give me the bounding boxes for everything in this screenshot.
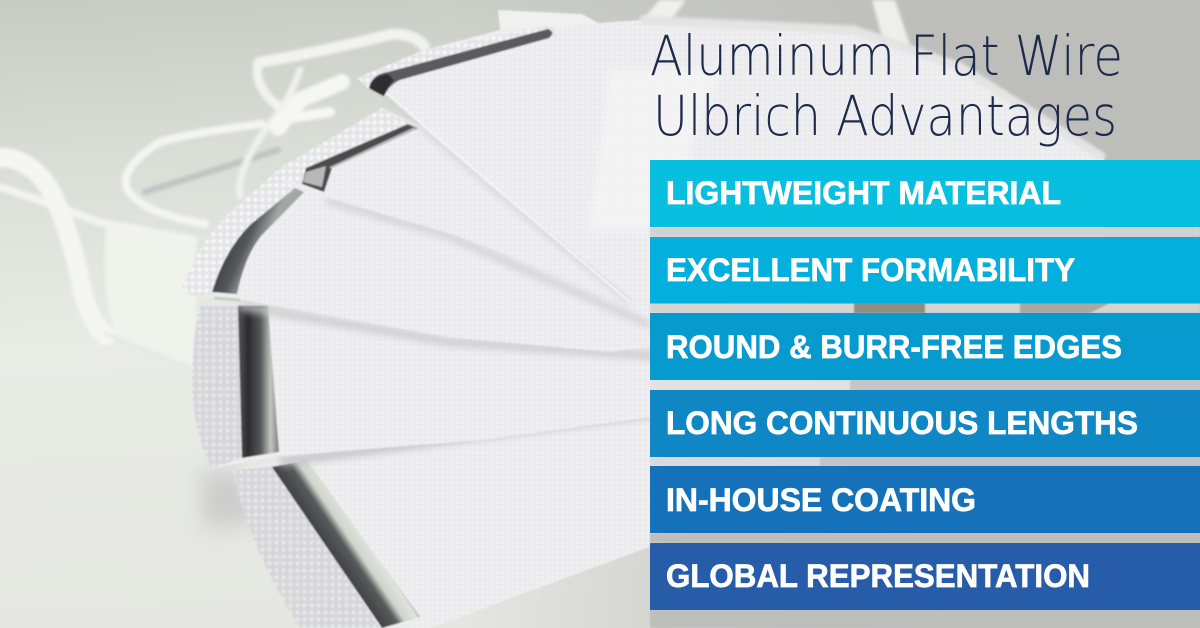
advantages list (650, 160, 1200, 610)
bar: in-house coating: IN-HOUSE COATING (666, 482, 976, 518)
photo: elastic straps (0, 0, 910, 372)
photo: third mask (182, 168, 660, 356)
bar: global representation (650, 543, 1200, 610)
title line 2: Ulbrich Advantages (653, 84, 1117, 148)
title (650, 24, 1123, 148)
photo: top mask (357, 10, 1104, 305)
bar: round and burr-free edges (650, 313, 1200, 380)
photo: fourth mask (192, 306, 660, 468)
photo: soft folds at right edge (650, 227, 1200, 628)
bar: in-house coating (650, 466, 1200, 533)
title line 1: Aluminum Flat Wire (650, 24, 1123, 88)
bar: lightweight material (650, 160, 1200, 227)
bar: round and burr-free edges: ROUND & BURR-FREE EDGES (666, 329, 1122, 365)
bar: excellent formability: EXCELLENT FORMABILITY (666, 252, 1075, 288)
bar: lightweight material: LIGHTWEIGHT MATERIAL (666, 175, 1061, 211)
bar: long continuous lengths: LONG CONTINUOUS LENGTHS (666, 405, 1138, 441)
bar: excellent formability (650, 237, 1200, 304)
photo: bottom mask (200, 400, 660, 628)
photo: second mask (280, 108, 660, 325)
bar: global representation: GLOBAL REPRESENTATION (666, 558, 1090, 594)
bar: long continuous lengths (650, 390, 1200, 457)
